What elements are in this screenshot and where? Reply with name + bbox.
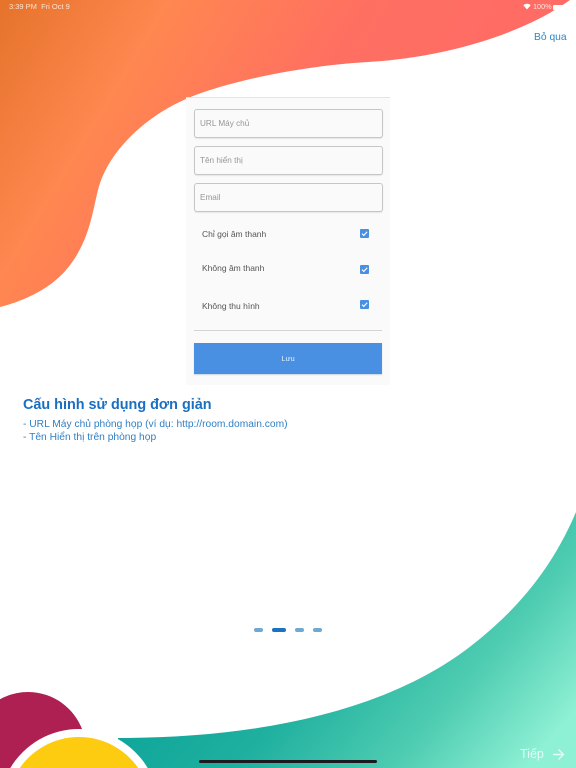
label: no video: Không thu hình [202, 301, 260, 311]
top orange wave [0, 0, 570, 307]
checkbox: audio only [360, 229, 369, 238]
heading: Cấu hình sử dụng đơn giản [23, 397, 212, 413]
white ring [10, 729, 148, 768]
page indicator [254, 628, 322, 632]
status bar time: 3:39 PM Fri Oct 9 [9, 2, 70, 11]
checkbox: no video [360, 300, 369, 309]
description text: - URL Máy chủ phòng họp (ví dụ: http://room.domain.com) [23, 419, 288, 430]
next label: Tiếp [520, 747, 544, 761]
save button [194, 343, 382, 374]
home indicator [199, 760, 377, 763]
yellow circle [20, 737, 138, 768]
field: display name [194, 146, 383, 175]
description text: - Tên Hiển thị trên phòng họp [23, 432, 156, 442]
dot 3 [295, 628, 304, 632]
maroon circle [0, 692, 86, 768]
bottom teal wave [118, 512, 576, 768]
form background [186, 97, 390, 385]
dot 4 [313, 628, 322, 632]
icon: wifi [523, 4, 531, 10]
icon: battery [553, 5, 565, 10]
field: email: Email [200, 193, 220, 202]
skip link: Bỏ qua [534, 32, 567, 43]
field: server URL [194, 109, 383, 138]
status bar right [523, 2, 562, 11]
label: muted: Không âm thanh [202, 263, 264, 273]
battery percent: 100% [533, 2, 552, 11]
field: server URL: URL Máy chủ [200, 119, 249, 128]
checkbox: muted [360, 265, 369, 274]
icon: arrow right [553, 749, 564, 760]
next button [520, 747, 564, 761]
description text [23, 419, 288, 442]
dot 2 active [272, 628, 286, 632]
save button: Lưu [281, 354, 295, 363]
dot 1 [254, 628, 263, 632]
field: display name: Tên hiển thị [200, 156, 243, 165]
label: audio only: Chỉ gọi âm thanh [202, 229, 266, 239]
divider [194, 330, 382, 331]
field: email [194, 183, 383, 212]
